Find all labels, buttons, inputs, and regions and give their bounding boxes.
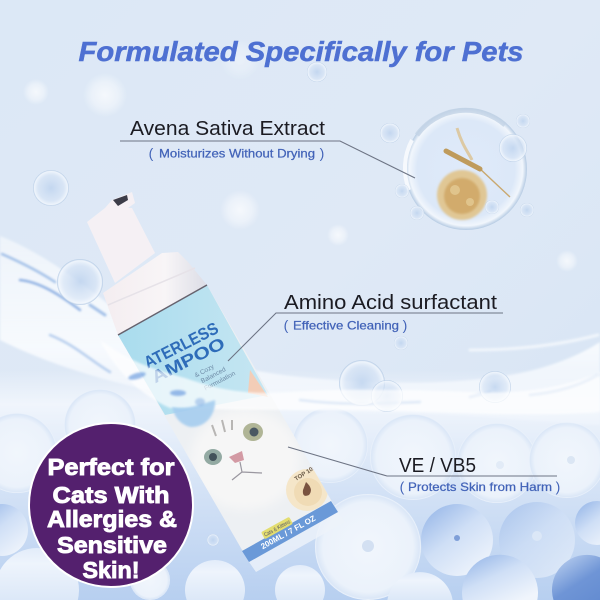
- callout: avena sativa extract: ): [320, 145, 324, 161]
- pump cap: [103, 252, 207, 335]
- purple badge: [29, 423, 193, 587]
- floating bubbles: [33, 62, 511, 546]
- callout: VE / VB5: VE / VB5: [399, 455, 476, 477]
- callout: VE / VB5: [288, 447, 560, 494]
- callout: VE / VB5: ): [556, 478, 560, 494]
- cat face: [196, 417, 292, 503]
- water ripple streaks: [2, 254, 598, 404]
- blue water streaks: [128, 371, 205, 406]
- callout: avena sativa extract: [120, 118, 415, 178]
- pink corner: [248, 370, 268, 397]
- purple badge: Cats With: [52, 482, 170, 508]
- blue water blob: [172, 400, 215, 427]
- bubble: oat and wheat ingredient: [380, 108, 534, 230]
- product small text: & Cozy: [194, 363, 216, 379]
- callout: VE / VB5: (: [400, 478, 405, 494]
- callout: amino acid surfactant: ): [403, 317, 407, 333]
- cats and kittens tag: Cats & Kittens: [263, 519, 292, 539]
- callout: amino acid surfactant: Amino Acid surfactant: [284, 292, 497, 314]
- product small text: [194, 356, 237, 394]
- blue label: [118, 285, 268, 415]
- callout: amino acid surfactant: Effective Cleaning: [293, 318, 399, 332]
- volume text: 200ML / 7 FL OZ: [259, 514, 317, 551]
- purple badge: Perfect for: [48, 454, 174, 480]
- purple badge: Skin!: [82, 557, 140, 583]
- callout: avena sativa extract: (: [149, 145, 154, 161]
- product bottle: [87, 192, 345, 572]
- nozzle opening: [113, 195, 128, 206]
- bottom water bubbles field: [0, 370, 600, 600]
- callout: VE / VB5: Protects Skin from Harm: [408, 480, 552, 494]
- purple badge: Sensitive: [57, 532, 167, 558]
- product small text: Balanced: [200, 366, 227, 385]
- callout: amino acid surfactant: (: [284, 317, 289, 333]
- pump nozzle: [87, 192, 155, 283]
- badge: TOP 10s: [294, 465, 318, 483]
- callout: avena sativa extract: Avena Sativa Extract: [130, 118, 325, 140]
- purple badge: Allergies &: [47, 506, 177, 532]
- brand name: ATERLESS: [141, 319, 222, 372]
- translucent bottle base: [249, 512, 345, 572]
- badge: [286, 465, 328, 511]
- blurred background bubbles: [23, 40, 578, 272]
- callout: avena sativa extract: Moisturizes Without Drying: [159, 146, 315, 160]
- title: Formulated Specifically for Pets: [78, 36, 524, 67]
- water wave behind bottle: [0, 236, 600, 425]
- bottle body: [118, 285, 338, 562]
- brand name second line: AMPOO: [148, 334, 228, 387]
- product small text: Formulation: [203, 370, 237, 392]
- bottle bottom band: [242, 501, 338, 562]
- water wave in front of bottle: [100, 340, 600, 414]
- callout: amino acid surfactant: [228, 292, 503, 361]
